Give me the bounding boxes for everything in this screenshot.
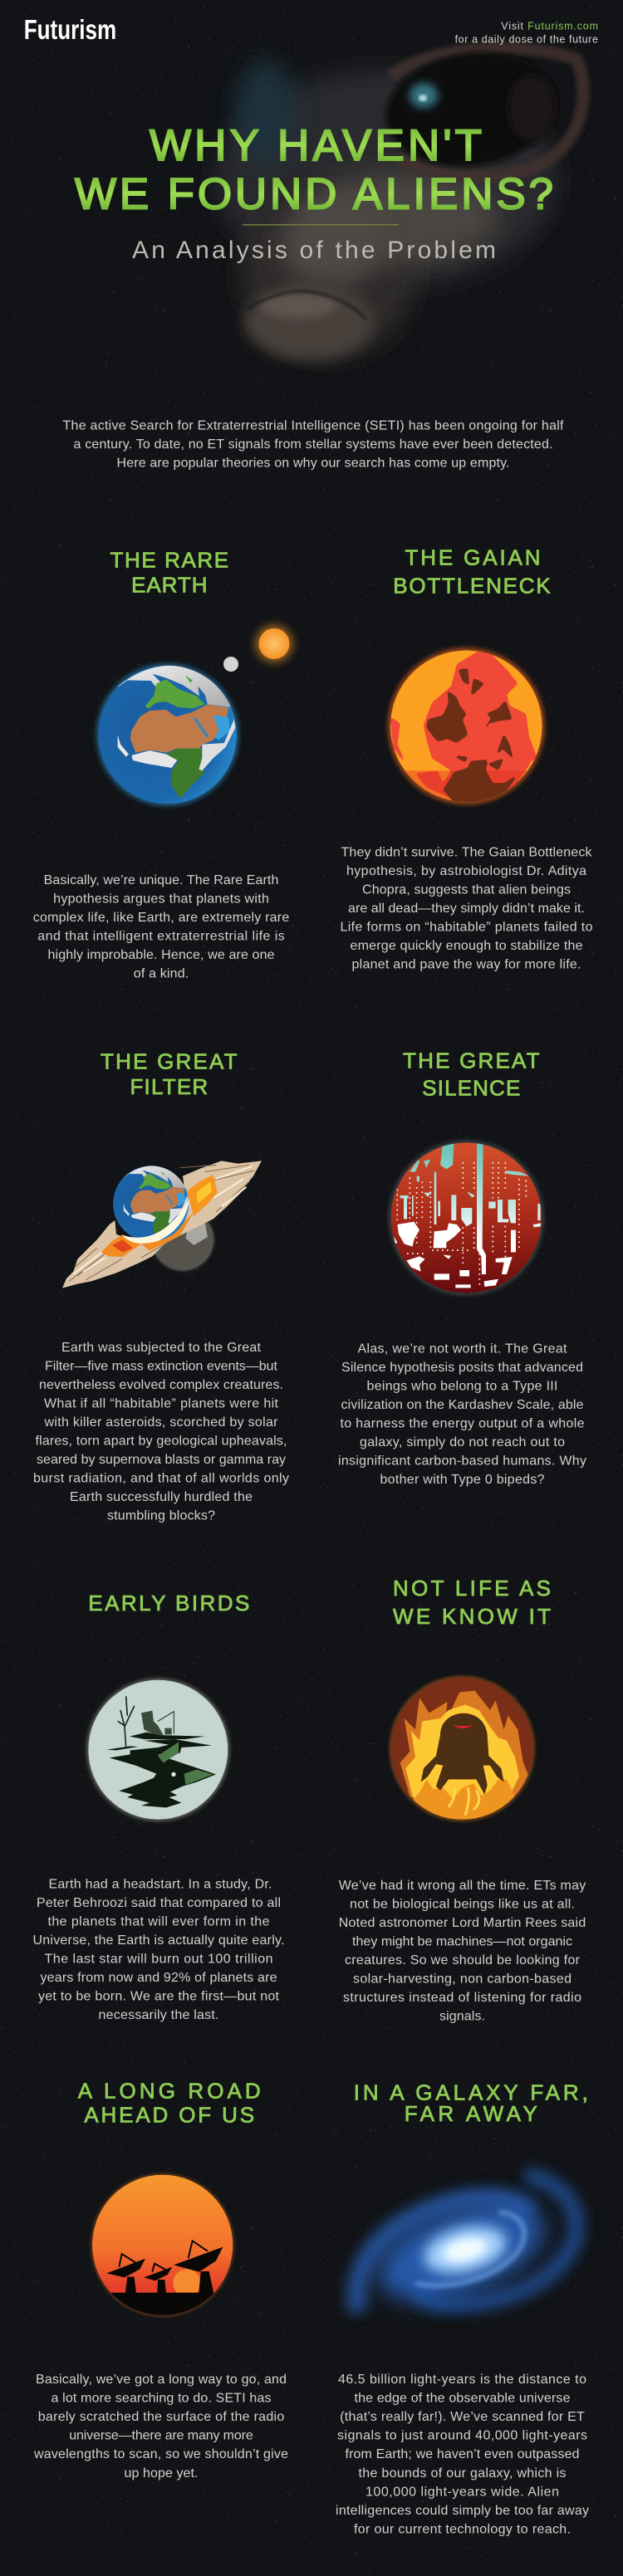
text block	[336, 2373, 589, 2537]
panel: the gaian bottleneck	[341, 545, 593, 971]
icon: radio dishes at sunset	[90, 2172, 236, 2318]
text block: to harness the energy output of a whole	[341, 1416, 585, 1430]
heading: THE GREAT	[403, 1048, 540, 1073]
text block: stumbling blocks?	[107, 1509, 215, 1523]
heading: AHEAD OF US	[84, 2103, 254, 2128]
text block: emerge quickly enough to stabilize the	[351, 939, 583, 953]
panel: the great filter	[33, 1048, 289, 1523]
text block: Filter—five mass extinction events—but	[45, 1360, 278, 1373]
heading: BOTTLENECK	[393, 573, 551, 598]
heading: A LONG ROAD	[78, 2079, 261, 2104]
site link: Visit Futurism.com	[501, 21, 598, 32]
text block: years from now and 92% of planets are	[40, 1971, 277, 1985]
text block: What if all “habitable” planets were hit	[44, 1396, 279, 1411]
text block: galaxy, simply do not reach out to	[360, 1435, 565, 1449]
heading: WE KNOW IT	[393, 1604, 551, 1629]
heading: FAR AWAY	[405, 2101, 537, 2126]
heading	[354, 2080, 588, 2126]
text block: 46.5 billion light-years is the distance to	[338, 2373, 586, 2387]
text block: universe—there are many more	[69, 2429, 253, 2443]
text block: We’ve had it wrong all the time. ETs may	[339, 1879, 586, 1893]
text block: flares, torn apart by geological upheavals,	[35, 1435, 287, 1448]
text block: Basically, we’re unique. The Rare Earth	[44, 873, 278, 887]
text block: Peter Behroozi said that compared to all	[37, 1896, 281, 1910]
intro text: The active Search for Extraterrestrial Intelligence (SETI) has been ongoing for half	[63, 418, 564, 433]
heading: SILENCE	[422, 1076, 520, 1101]
heading: THE GAIAN	[405, 545, 540, 569]
panel: a long road ahead of us	[33, 2079, 288, 2481]
text block: hypothesis argues that planets with	[53, 892, 269, 907]
intro text	[63, 418, 564, 470]
text block: Noted astronomer Lord Martin Rees said	[339, 1916, 586, 1930]
panel: the rare earth	[33, 547, 293, 981]
text block: Earth was subjected to the Great	[61, 1341, 262, 1355]
text block: highly improbable. Hence, we are one	[48, 948, 275, 962]
icon: moon with astronaut fishing	[87, 1679, 229, 1821]
text block: they might be machines—not organic	[352, 1935, 572, 1949]
text block: for our current technology to reach.	[354, 2523, 571, 2537]
text block	[33, 2373, 288, 2481]
title: WHY HAVEN'T	[150, 121, 482, 170]
subtitle: An Analysis of the Problem	[132, 237, 496, 264]
text block: Silence hypothesis posits that advanced	[341, 1361, 583, 1375]
text block: 100,000 light-years wide. Alien	[365, 2485, 559, 2499]
alien face	[216, 42, 583, 360]
text block: Life forms on “habitable” planets failed to	[341, 920, 593, 935]
text block: planet and pave the way for more life.	[352, 958, 581, 971]
text block: Universe, the Earth is actually quite early.	[33, 1933, 284, 1948]
text block: insignificant carbon-based humans. Why	[338, 1454, 586, 1468]
icon: circuit city planet	[389, 1140, 544, 1295]
text block: up hope yet.	[125, 2466, 198, 2481]
text block	[341, 845, 593, 971]
text block: Earth successfully hurdled the	[70, 1490, 253, 1504]
text block: Alas, we’re not worth it. The Great	[357, 1342, 567, 1356]
panel: in a galaxy far, far away	[336, 2080, 589, 2537]
text block: not be biological beings like us at all.	[350, 1898, 575, 1912]
heading	[393, 545, 551, 598]
text block: bother with Type 0 bipeds?	[380, 1473, 545, 1487]
text block: (that’s really far!). We’ve scanned for ET	[340, 2410, 585, 2424]
text block: of a kind.	[134, 966, 189, 981]
panel: the great silence	[338, 1048, 586, 1487]
icon: earth with moon and sun	[96, 624, 293, 806]
text block: Basically, we’ve got a long way to go, and	[36, 2373, 287, 2387]
panel: early birds	[33, 1591, 284, 2022]
text block: necessarily the last.	[98, 2008, 219, 2022]
text block: yet to be born. We are the first—but not	[38, 1990, 280, 2004]
icon: spiral galaxy	[356, 2175, 576, 2320]
text block: hypothesis, by astrobiologist Dr. Aditya	[346, 864, 586, 878]
text block: barely scratched the surface of the radio	[38, 2410, 284, 2424]
site link	[455, 21, 598, 45]
heading	[101, 1048, 238, 1099]
title: WE FOUND ALIENS?	[75, 169, 553, 219]
icon: rocket creature in flames	[389, 1675, 535, 1821]
text block: They didn’t survive. The Gaian Bottleneck	[341, 845, 593, 860]
text block: The last star will burn out 100 trillion	[45, 1953, 272, 1967]
heading: THE RARE	[110, 547, 228, 572]
text block: burst radiation, and that of all worlds only	[33, 1471, 289, 1486]
text block: structures instead of listening for radio	[343, 1991, 581, 2005]
text block: a lot more searching to do. SETI has	[52, 2391, 271, 2405]
text block: solar-harvesting, non carbon-based	[353, 1972, 571, 1987]
text block: with killer asteroids, scorched by solar	[43, 1415, 278, 1430]
text block: creatures. So we should be looking for	[345, 1953, 581, 1967]
logo: Futurism: Futurism	[24, 14, 116, 45]
heading: NOT LIFE AS	[393, 1576, 551, 1601]
text block: signals.	[439, 2010, 485, 2024]
text block: the bounds of our galaxy, which is	[359, 2466, 567, 2481]
text block: from Earth; we haven’t even outpassed	[346, 2447, 580, 2461]
intro text: Here are popular theories on why our search has come up empty.	[116, 457, 510, 470]
site link: for a daily dose of the future	[455, 33, 598, 45]
text block	[33, 1878, 284, 2022]
text block: Chopra, suggests that alien beings	[362, 883, 571, 897]
text block: seared by supernova blasts or gamma ray	[37, 1453, 286, 1467]
text block	[338, 1342, 586, 1487]
heading	[110, 547, 228, 598]
heading	[78, 2079, 261, 2128]
panel: not life as we know it	[339, 1576, 586, 2024]
text block: are all dead—they simply didn’t make it.	[348, 902, 585, 916]
heading	[403, 1048, 540, 1101]
title	[75, 121, 553, 219]
icon: earth hit by debris	[62, 1161, 262, 1288]
text block: nevertheless evolved complex creatures.	[39, 1378, 283, 1392]
heading	[393, 1576, 551, 1629]
text block: and that intelligent extraterrestrial life is	[37, 930, 285, 943]
intro text: a century. To date, no ET signals from stellar systems have ever been detected.	[73, 437, 553, 452]
text block: intelligences could simply be too far away	[336, 2504, 589, 2518]
text block: civilization on the Kardashev Scale, able	[341, 1398, 584, 1412]
heading: FILTER	[130, 1074, 208, 1099]
text block: wavelengths to scan, so we shouldn’t give	[33, 2447, 288, 2461]
text block: Earth had a headstart. In a study, Dr.	[48, 1878, 272, 1892]
text block: beings who belong to a Type III	[367, 1379, 558, 1393]
text block	[339, 1879, 586, 2024]
heading: EARLY BIRDS	[88, 1591, 249, 1615]
heading: IN A GALAXY FAR,	[354, 2080, 588, 2104]
heading: THE GREAT	[101, 1048, 238, 1073]
heading: EARTH	[131, 573, 208, 598]
text block	[33, 1341, 289, 1523]
text block: the edge of the observable universe	[354, 2391, 571, 2405]
text block	[33, 873, 289, 981]
text block: signals to just around 40,000 light-years	[337, 2429, 587, 2443]
text block: complex life, like Earth, are extremely rare	[33, 911, 289, 925]
icon: burning planet	[388, 648, 545, 804]
text block: the planets that will ever form in the	[48, 1915, 270, 1929]
